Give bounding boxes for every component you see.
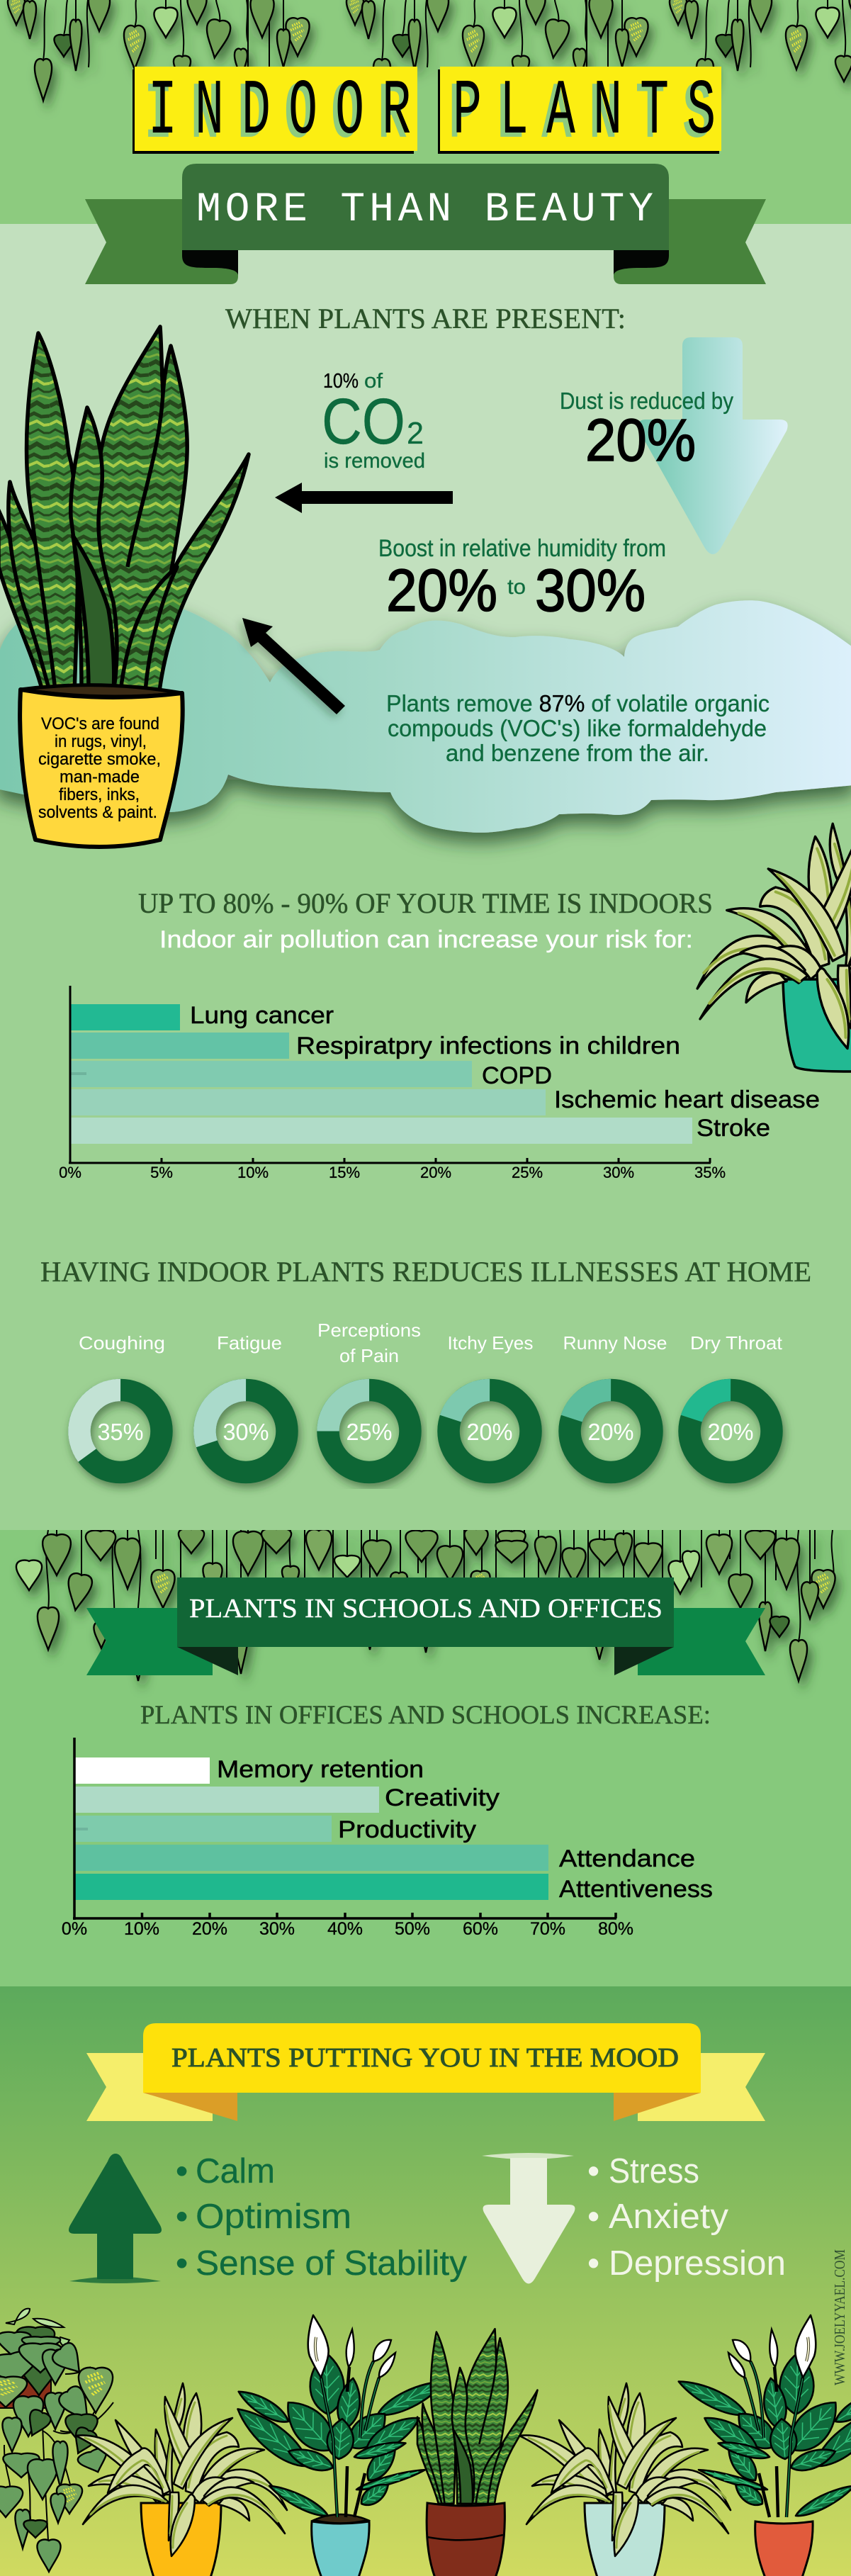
stat: co2 removed: of [364, 370, 383, 393]
stat: dust reduced: Dust is reduced by [560, 388, 733, 414]
donut chart: itchy eyes: Itchy Eyes [448, 1332, 533, 1354]
chart axes and scale: 20% [192, 1919, 227, 1939]
list: moods decreased [587, 2152, 786, 2283]
chart axes and scale: 30% [603, 1164, 634, 1181]
hanging vines top [8, 0, 851, 101]
bar: productivity: Productivity [338, 1816, 476, 1843]
peace lily blue pot [230, 2315, 449, 2576]
banner: plants in schools and offices [86, 1577, 765, 1675]
text: plants remove voc: Plants remove 87% of volatile organic [386, 690, 770, 716]
arrow: voc to plant [242, 618, 345, 714]
list: moods increased: Sense of Stability [196, 2244, 467, 2283]
donut chart: perceptions of pain: of Pain [339, 1345, 399, 1366]
snake plant large [0, 327, 249, 691]
list: moods decreased: • [587, 2152, 599, 2190]
stat: humidity boost: to [507, 575, 526, 599]
arrow: left to plant [275, 483, 453, 513]
stat: humidity boost: Boost in relative humidity from [378, 535, 666, 562]
yellow pot with voc note: fibers, inks, [59, 785, 140, 804]
bar: lung cancer [70, 1002, 334, 1030]
title: Indoor Plants: INDOOR [148, 69, 429, 157]
banner: plants in schools and offices: PLANTS IN SCHOOLS AND OFFICES [189, 1594, 663, 1624]
yellow pot with voc note: in rugs, vinyl, [55, 732, 147, 751]
chart axes and scale: 0% [59, 1164, 81, 1181]
peace lily red pot [675, 2315, 851, 2576]
snake plant brown pot [417, 2329, 537, 2576]
stat: co2 removed: 2 [407, 416, 424, 451]
banner: more than beauty [85, 164, 766, 284]
donut chart: fatigue: 30% [222, 1419, 269, 1445]
donut chart: perceptions of pain: Perceptions [317, 1320, 421, 1341]
yellow pot with voc note: man-made [60, 767, 140, 787]
list: moods decreased: • [587, 2244, 599, 2283]
text: plants remove voc [386, 690, 770, 766]
list: moods decreased: • [587, 2198, 599, 2236]
donut chart: coughing: 35% [98, 1419, 143, 1445]
stat: dust reduced [560, 388, 733, 473]
bar: attendance [74, 1845, 695, 1872]
heading: when plants are present: WHEN PLANTS ARE PRESENT: [225, 303, 626, 334]
list: moods decreased: Anxiety [609, 2198, 729, 2236]
donut chart: itchy eyes [438, 1332, 541, 1483]
donut chart: coughing [63, 1332, 178, 1489]
list: moods increased: Optimism [196, 2198, 351, 2236]
bar: stroke: Stroke [697, 1115, 770, 1142]
chart axes and scale: 5% [150, 1164, 173, 1181]
bar: ischemic heart disease: Ischemic heart disease [554, 1086, 820, 1113]
chart axes and scale: 60% [463, 1919, 498, 1939]
chart axes and scale: 80% [598, 1919, 633, 1939]
heading: reduces illnesses: HAVING INDOOR PLANTS REDUCES ILLNESSES AT HOME [40, 1256, 811, 1288]
donut chart: perceptions of pain [317, 1320, 421, 1473]
subheading: indoor air pollution: Indoor air pollution can increase your risk for: [159, 926, 693, 953]
stat: co2 removed: 10% [323, 370, 359, 393]
stat: co2 removed [322, 370, 425, 473]
pothos hanging plant [0, 2309, 113, 2572]
stat: humidity boost [378, 535, 666, 624]
title: Indoor Plants: PLANTS [453, 69, 733, 157]
list: moods decreased: Stress [609, 2152, 699, 2190]
bar: creativity [74, 1784, 500, 1813]
stat: humidity boost: 20% [386, 557, 497, 624]
stat: co2 removed: is removed [324, 449, 425, 473]
hanging vines schools section [16, 1529, 835, 1681]
heading: time indoors: UP TO 80% - 90% OF YOUR TIME IS INDOORS [138, 887, 713, 919]
background: pale air panel [0, 224, 851, 780]
bar: respiratory infections [70, 1033, 680, 1059]
bar: respiratory infections: Respiratpry infections in children [296, 1033, 680, 1059]
chart axes and scale: 70% [530, 1919, 565, 1939]
bar: memory retention: Memory retention [217, 1756, 424, 1783]
chart axes and scale: 15% [329, 1164, 360, 1181]
donut chart: coughing: Coughing [79, 1332, 165, 1354]
bar: attendance: Attendance [559, 1845, 695, 1872]
arrow: down [482, 2153, 575, 2283]
title: Indoor Plants [133, 67, 733, 160]
donut chart: runny nose: Runny Nose [563, 1332, 667, 1354]
chart axes and scale: 30% [259, 1919, 295, 1939]
bar: ischemic heart disease [70, 1086, 820, 1115]
list: moods increased: • [176, 2198, 188, 2236]
stat: co2 removed: CO [322, 386, 405, 458]
bar: productivity [74, 1816, 476, 1843]
yellow pot with voc note: VOC's are found [41, 714, 159, 733]
background: health section [0, 780, 851, 1530]
list: moods increased: • [176, 2244, 188, 2283]
bar: attentiveness [74, 1874, 713, 1903]
chart axes and scale: 10% [124, 1919, 159, 1939]
stat: dust reduced: 20% [585, 407, 696, 473]
list: moods increased [176, 2152, 467, 2283]
chart axes and scale [59, 986, 726, 1181]
banner: plants putting you in the mood: PLANTS PUTTING YOU IN THE MOOD [171, 2043, 679, 2073]
bar: copd [70, 1061, 552, 1089]
chart axes and scale: 0% [62, 1919, 87, 1939]
bar: creativity: Creativity [385, 1784, 500, 1811]
background: top band [0, 0, 851, 224]
donut chart: runny nose [559, 1332, 667, 1483]
chart axes and scale: 40% [327, 1919, 363, 1939]
bar: lung cancer: Lung cancer [190, 1002, 334, 1029]
bar: attentiveness: Attentiveness [559, 1876, 713, 1903]
list: moods increased: • [176, 2152, 188, 2190]
list: moods decreased: Depression [609, 2244, 786, 2283]
credit: website: WWW.JOELYYAEL.COM [831, 2249, 848, 2385]
bar: copd: COPD [482, 1062, 552, 1089]
chart axes and scale: 25% [512, 1164, 543, 1181]
donut chart: dry throat: Dry Throat [690, 1332, 783, 1354]
donut chart: itchy eyes: 20% [466, 1419, 513, 1445]
donut chart: fatigue [194, 1332, 298, 1483]
banner: more than beauty: MORE THAN BEAUTY [196, 187, 653, 233]
bar chart: schools and offices [62, 1738, 713, 1939]
arrow: up [69, 2154, 162, 2283]
donut chart: fatigue: Fatigue [217, 1332, 282, 1354]
chart axes and scale: 50% [395, 1919, 430, 1939]
chart axes and scale: 20% [420, 1164, 451, 1181]
chart axes and scale: 10% [237, 1164, 269, 1181]
bar chart: risk of illness [59, 986, 820, 1181]
stat: humidity boost: 30% [535, 557, 646, 624]
spider plant teal pot [697, 823, 851, 1072]
yellow pot with voc note: solvents & paint. [38, 803, 157, 822]
spider plant yellow pot [76, 2383, 287, 2576]
yellow pot with voc note [20, 685, 183, 847]
bar: stroke [70, 1115, 770, 1144]
yellow pot with voc note: cigarette smoke, [38, 750, 161, 769]
arrow: dust reduced [638, 337, 788, 554]
chart axes and scale [62, 1738, 633, 1939]
heading: plants increase: PLANTS IN OFFICES AND SCHOOLS INCREASE: [140, 1701, 711, 1730]
background: mood section gradient [0, 1986, 851, 2576]
title: Indoor Plants: PLANTS [449, 72, 729, 160]
chart axes and scale: 35% [694, 1164, 726, 1181]
donut chart: runny nose: 20% [588, 1419, 633, 1445]
cloud of clean air [0, 592, 851, 833]
banner: plants putting you in the mood [86, 2023, 765, 2121]
text: plants remove voc: compouds (VOC's) like formaldehyde [388, 715, 767, 741]
list: moods increased: Calm [196, 2152, 275, 2190]
bar: memory retention [74, 1756, 424, 1784]
spider plant pale pot [519, 2383, 731, 2576]
background: schools section [0, 1530, 851, 1986]
text: plants remove voc: and benzene from the air. [446, 740, 709, 766]
donut chart: dry throat: 20% [707, 1419, 754, 1445]
donut chart: perceptions of pain: 25% [346, 1419, 393, 1445]
donut chart: dry throat [679, 1332, 783, 1483]
title: Indoor Plants: INDOOR [144, 72, 424, 160]
